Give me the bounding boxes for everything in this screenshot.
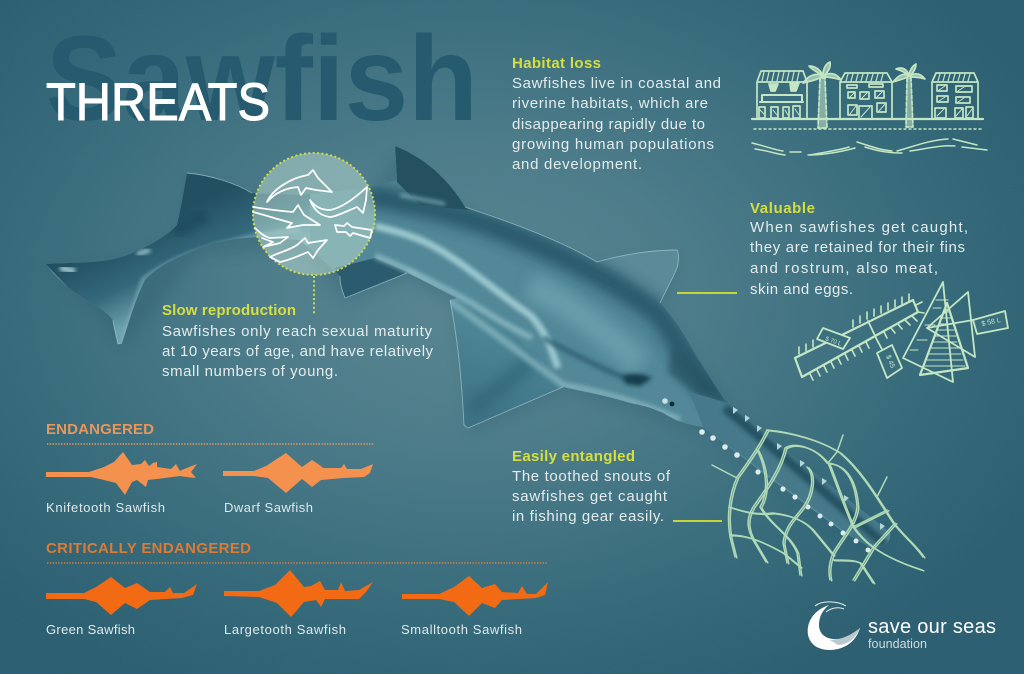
text: easily entangled: Easily entangled [512, 448, 635, 465]
text: habitat loss: Sawfishes live in coastal and [512, 75, 721, 92]
sawfish illustration [46, 146, 890, 552]
light central area [530, 285, 640, 365]
dorsal fin [395, 144, 468, 210]
logo: save our seas foundation [808, 602, 996, 651]
text: habitat loss: disappearing rapidly due to [512, 116, 705, 133]
text: habitat loss: riverine habitats, which are [512, 95, 708, 112]
text: valuable: skin and eggs. [750, 281, 853, 298]
rostrum teeth [699, 407, 885, 552]
connector: entangled [673, 520, 722, 522]
text: valuable: they are retained for their fins [750, 239, 965, 256]
text: slow reproduction: Sawfishes only reach sexual maturity [162, 323, 432, 340]
text: easily entangled [512, 448, 671, 525]
icon: school of young sawfish [253, 170, 372, 262]
icon: priced rostrum and fins: $ 70 L [824, 336, 843, 348]
shark rim highlight [113, 173, 679, 428]
text: valuable: Valuable [750, 200, 815, 217]
icon: knifetooth sawfish [46, 452, 197, 495]
icon: priced rostrum and fins: $ 58 L [981, 317, 1002, 328]
icon: dwarf sawfish [223, 453, 373, 493]
pelvic fin [335, 258, 412, 300]
text: slow reproduction [162, 302, 434, 380]
icon: smalltooth sawfish [402, 576, 548, 616]
circle: small numbers of young [253, 153, 375, 315]
legend: critically endangered: CRITICALLY ENDANGERED [46, 540, 251, 557]
icon: coastal buildings and palms [752, 62, 987, 155]
legend: endangered: ENDANGERED [46, 421, 154, 438]
text: habitat loss [512, 55, 721, 173]
text: valuable: and rostrum, also meat, [750, 260, 938, 277]
net icon [712, 430, 925, 584]
text: habitat loss: growing human populations [512, 136, 714, 153]
label: Knifetooth Sawfish [46, 500, 165, 515]
label: Smalltooth Sawfish [401, 622, 522, 637]
icon: priced rostrum and fins: $ 45 [884, 354, 896, 369]
upper body dark band [365, 195, 727, 410]
tail [40, 165, 310, 350]
connector: valuable [677, 292, 737, 294]
icon: largetooth sawfish [224, 570, 373, 617]
connector: circle to text [313, 276, 315, 315]
text: slow reproduction: small numbers of young. [162, 363, 338, 380]
legend: critically endangered [46, 540, 548, 637]
icon: palm trees [818, 78, 827, 128]
text: easily entangled: sawfishes get caught [512, 488, 668, 505]
text: slow reproduction: Slow reproduction [162, 302, 296, 319]
text: valuable: When sawfishes get caught, [750, 219, 968, 236]
text: easily entangled: The toothed snouts of [512, 468, 671, 485]
sub wordmark: foundation [868, 637, 927, 651]
light streaks [375, 226, 558, 368]
left pectoral fin [457, 337, 560, 428]
text: habitat loss: Habitat loss [512, 55, 601, 72]
label: Green Sawfish [46, 622, 135, 637]
legend: endangered [46, 421, 374, 515]
wordmark: save our seas [868, 616, 996, 638]
title: THREATS: THREATS [46, 73, 270, 132]
text: easily entangled: in fishing gear easily. [512, 508, 664, 525]
rostrum [690, 392, 890, 552]
text: habitat loss: and development. [512, 156, 642, 173]
tag [817, 328, 850, 349]
right pectoral fin [606, 250, 678, 296]
label: Largetooth Sawfish [224, 622, 346, 637]
text: slow reproduction: at 10 years of age, and have relatively [162, 343, 434, 360]
text: valuable [750, 200, 968, 298]
title: Sawfish backdrop word: Sawfish [46, 10, 478, 146]
icon: priced rostrum and fins [795, 282, 1008, 382]
icon: green sawfish [46, 577, 197, 615]
icon: wave crescent [808, 602, 860, 650]
dark band to gill [543, 338, 625, 378]
gill and head shading [622, 374, 652, 386]
label: Dwarf Sawfish [224, 500, 313, 515]
